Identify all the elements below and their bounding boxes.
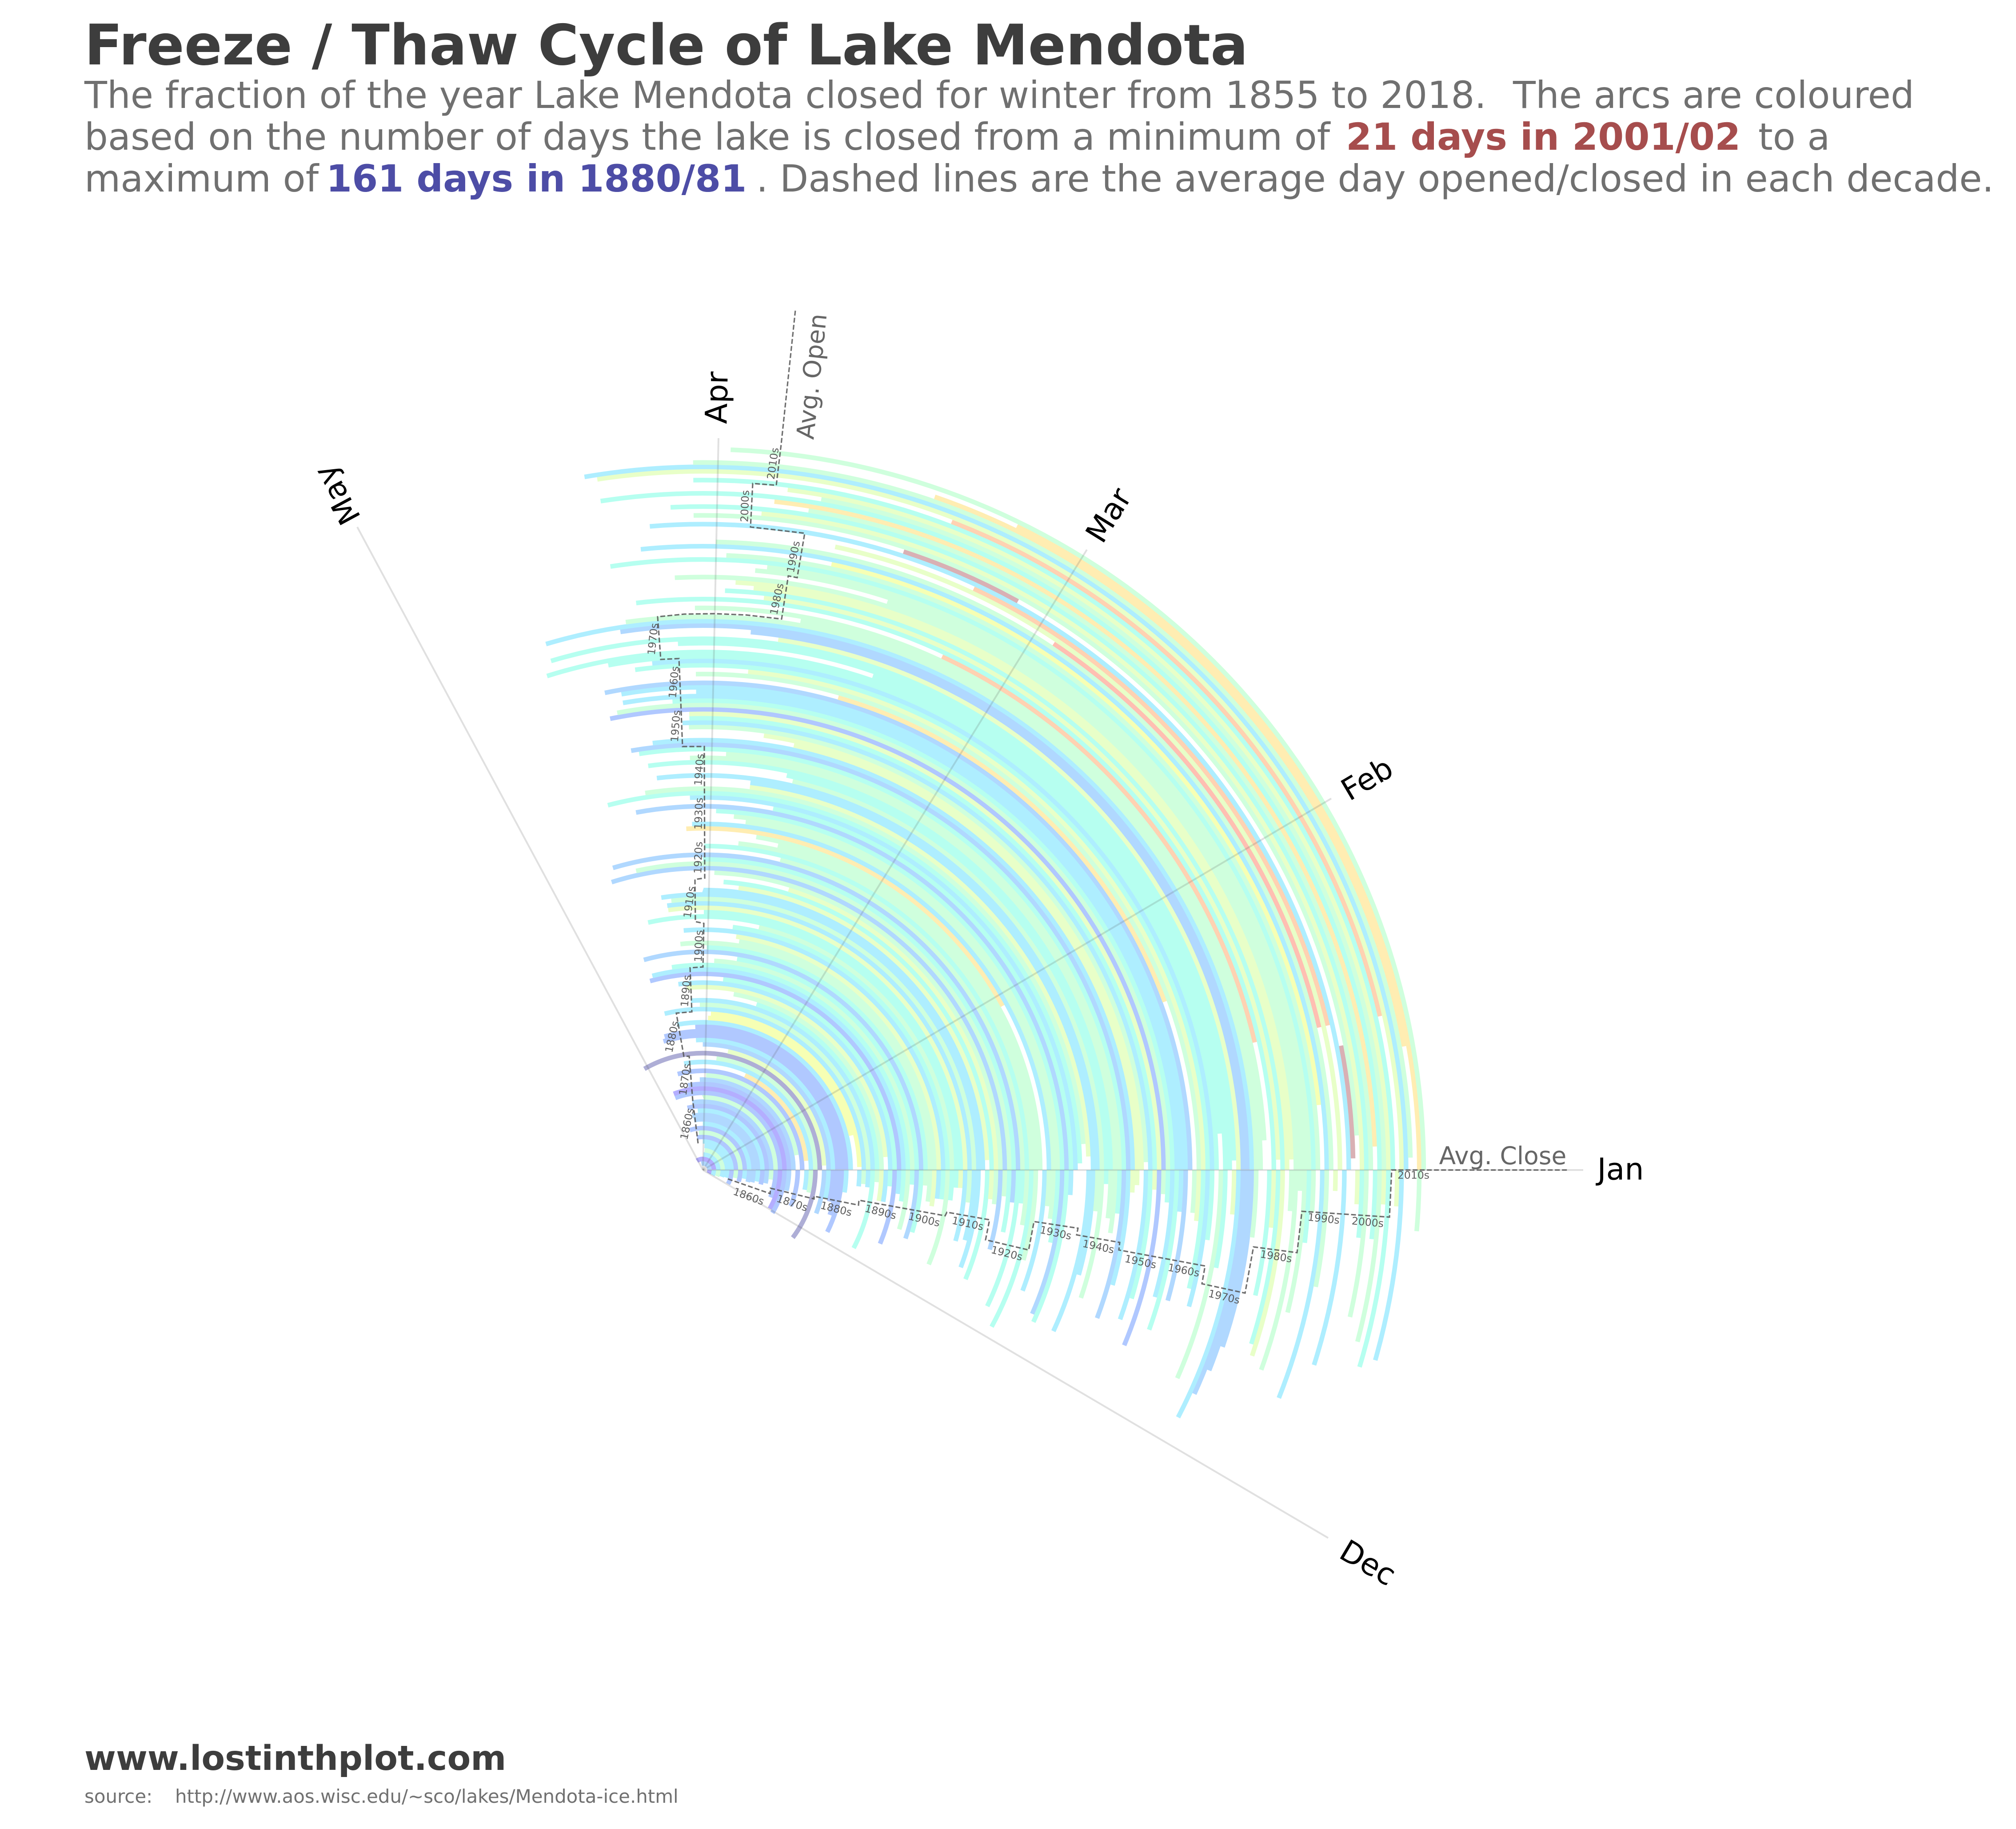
arcs: winters ending 1960-1969 bbox=[198, 665, 1208, 1675]
decade labels on open line: 1890s bbox=[678, 974, 694, 1007]
subtitle text block: 161 days in 1880/81 bbox=[326, 157, 747, 200]
decade labels on open line: 1980s bbox=[767, 582, 786, 616]
average line labels: Avg. Close bbox=[1439, 1142, 1566, 1170]
month labels: Jan bbox=[1596, 1152, 1644, 1187]
decade labels on close line: 1890s bbox=[864, 1202, 898, 1222]
decade labels on close line: 1900s bbox=[907, 1210, 941, 1229]
decade labels on close line bbox=[731, 1169, 1429, 1306]
subtitle text block: maximum of bbox=[84, 157, 319, 200]
decade labels on open line: 1920s bbox=[691, 842, 705, 874]
arc: maximum, 161 days in 1880/81 bbox=[586, 1053, 820, 1287]
polar chart: freeze/thaw arcs bbox=[48, 450, 1424, 1825]
decade labels on open line: 1930s bbox=[692, 798, 706, 830]
month labels: Apr bbox=[699, 371, 735, 424]
decade labels on open line: 1860s bbox=[678, 1107, 697, 1141]
month labels: May bbox=[307, 459, 368, 531]
month rays bbox=[357, 438, 1583, 1538]
decade labels on open line: 1880s bbox=[663, 1020, 682, 1054]
decade labels on open line: 2000s bbox=[738, 490, 752, 523]
footer: data source: http://www.aos.wisc.edu/~sco/lakes/Mendota-ice.html bbox=[175, 1785, 679, 1807]
subtitle text block: The fraction of the year Lake Mendota closed for winter from 1855 to 2018. bbox=[84, 74, 1486, 117]
arc: minimum, 21 days in 2001/02 bbox=[53, 520, 1353, 1820]
decade labels on close line: 1950s bbox=[1124, 1252, 1158, 1271]
month labels: Feb bbox=[1335, 751, 1399, 808]
month labels: Mar bbox=[1079, 482, 1139, 549]
title: Freeze / Thaw Cycle of Lake Mendota bbox=[84, 13, 1248, 78]
arcs: winters ending 1980-1989 bbox=[110, 577, 1296, 1763]
decade labels on close line: 1880s bbox=[819, 1199, 853, 1219]
decade labels on close line: 1870s bbox=[775, 1192, 809, 1214]
arcs: winters ending 1860-1869 bbox=[639, 1106, 767, 1234]
subtitle text block bbox=[84, 74, 1994, 200]
arcs: winters ending 1910-1919 bbox=[419, 886, 987, 1454]
arcs: winters ending 1990-1999 bbox=[66, 533, 1340, 1807]
arcs: winters ending 1940-1949 bbox=[286, 753, 1120, 1587]
decade labels on close line: 2000s bbox=[1351, 1214, 1384, 1230]
decade labels on open line: 1950s bbox=[668, 710, 683, 743]
decade labels on open line: 2010s bbox=[765, 447, 781, 480]
average line labels: Avg. Open bbox=[791, 312, 832, 441]
decade labels on open line: 1990s bbox=[784, 540, 802, 574]
average line labels bbox=[791, 312, 1566, 1170]
decade labels on close line: 1860s bbox=[731, 1185, 766, 1208]
decade labels on open line bbox=[645, 447, 802, 1141]
arcs: winters ending 2010-2018 bbox=[584, 450, 1424, 1367]
arcs: winters ending 1890-1899 bbox=[507, 974, 899, 1366]
arcs: winters ending 1880-1889 bbox=[551, 1018, 855, 1322]
decade labels on close line: 1970s bbox=[1207, 1287, 1241, 1306]
subtitle text block: 21 days in 2001/02 bbox=[1346, 115, 1741, 159]
arcs: winters ending 2000-2009 bbox=[48, 490, 1389, 1825]
arcs: winters ending 1930-1939 bbox=[331, 798, 1075, 1542]
arcs: winters ending 1950-1959 bbox=[242, 709, 1164, 1631]
subtitle text block: The arcs are coloured bbox=[1513, 74, 1914, 117]
decade labels on open line: 1900s bbox=[692, 930, 706, 962]
decade labels on close line: 1920s bbox=[990, 1243, 1024, 1263]
arcs: winters ending 1920-1929 bbox=[375, 842, 1031, 1498]
decade labels on close line: 1930s bbox=[1039, 1223, 1073, 1242]
decade labels on close line: 1910s bbox=[951, 1214, 985, 1233]
decade labels on close line: 1960s bbox=[1167, 1261, 1201, 1279]
arcs: winters ending 1900-1909 bbox=[463, 930, 943, 1410]
footer: website: www.lostinthplot.com bbox=[84, 1739, 506, 1778]
decade labels on close line: 1940s bbox=[1082, 1237, 1115, 1256]
decade labels on close line: 1990s bbox=[1307, 1211, 1340, 1226]
arcs: winters ending 1870-1879 bbox=[595, 1062, 811, 1278]
decade labels on open line: 1910s bbox=[681, 885, 698, 919]
subtitle text block: based on the number of days the lake is closed from a minimum of bbox=[84, 116, 1331, 159]
arcs: winters ending 1970-1979 bbox=[154, 621, 1252, 1719]
arcs: winters ending 1856-1859 bbox=[683, 1150, 723, 1190]
subtitle text block: . Dashed lines are the average day opened/closed in each decade. bbox=[756, 157, 1994, 200]
dashed line: average close date per decade bbox=[728, 1170, 1568, 1293]
decade labels on open line: 1960s bbox=[666, 666, 682, 699]
subtitle text block: to a bbox=[1758, 116, 1830, 159]
month labels: Dec bbox=[1333, 1533, 1402, 1593]
decade labels on open line: 1970s bbox=[645, 623, 661, 655]
footer: data source: source: bbox=[84, 1785, 152, 1807]
decade labels on close line: 1980s bbox=[1259, 1248, 1293, 1265]
decade labels on close line: 2010s bbox=[1397, 1169, 1429, 1181]
dashed line: average open date per decade bbox=[658, 310, 805, 1143]
month labels bbox=[307, 371, 1644, 1593]
decade labels on open line: 1870s bbox=[677, 1062, 693, 1096]
decade labels on open line: 1940s bbox=[692, 753, 707, 786]
